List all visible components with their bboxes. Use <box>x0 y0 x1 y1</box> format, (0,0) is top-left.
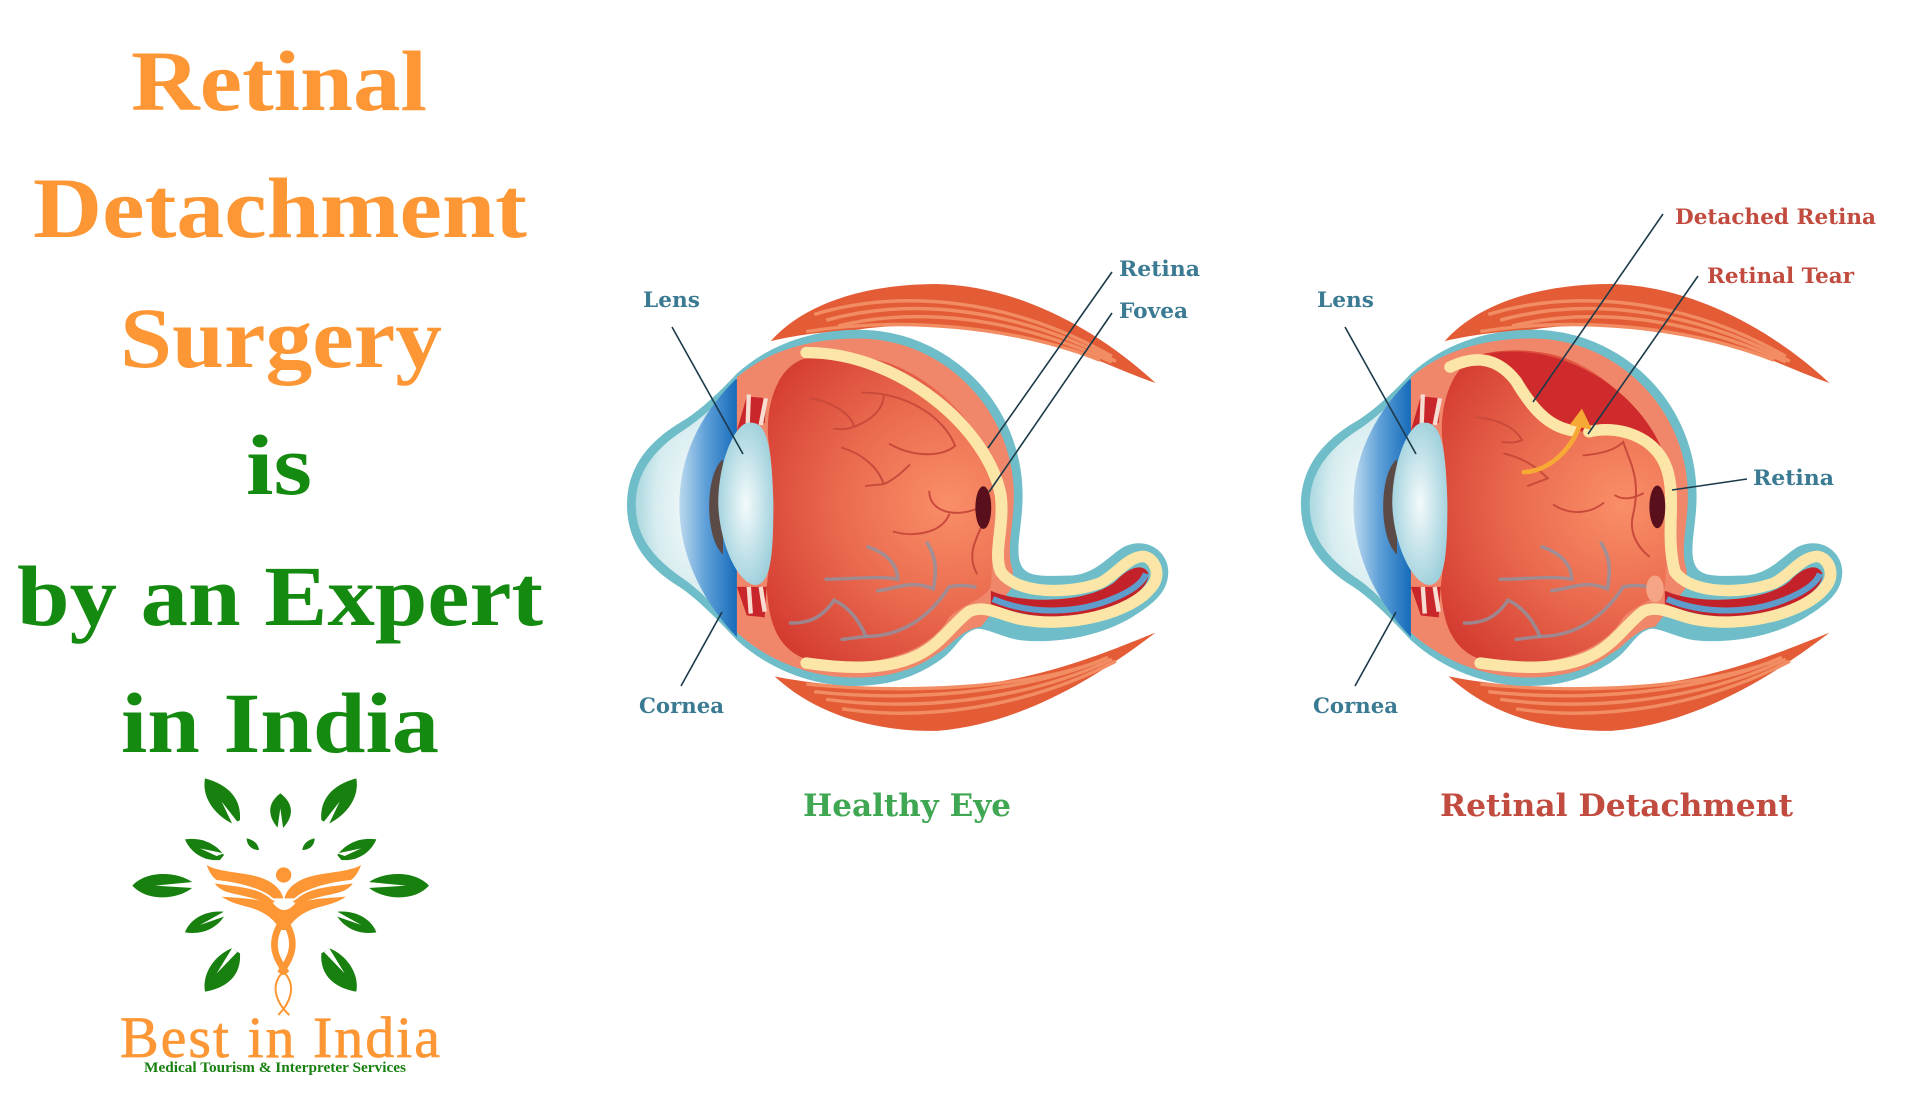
label: Fovea: Fovea <box>1119 298 1188 323</box>
iris band <box>679 379 739 637</box>
pupil <box>709 459 723 554</box>
label: Cornea: Cornea <box>639 693 724 718</box>
logo tagline: Medical Tourism & Interpreter Services <box>144 1060 406 1076</box>
leader lines <box>672 272 1112 686</box>
lens <box>718 423 773 585</box>
pupil <box>1383 459 1397 554</box>
title line: Surgery: Surgery <box>120 290 442 386</box>
caption: Healthy Eye: Healthy Eye <box>803 788 1011 824</box>
optic nerve vessels <box>1665 567 1822 617</box>
panel: healthy eye <box>627 256 1200 824</box>
title line: is: is <box>246 417 312 513</box>
fovea <box>1649 486 1665 528</box>
red veins <box>1476 417 1649 556</box>
label: Retina: Retina <box>1753 465 1834 490</box>
title line: Detachment: Detachment <box>33 160 527 256</box>
title line: Retinal: Retinal <box>131 33 427 129</box>
upper muscle <box>771 284 1156 383</box>
sclera and optic nerve outer <box>627 330 1168 686</box>
blue veins <box>1464 543 1649 639</box>
choroid <box>737 338 1014 678</box>
label: Cornea: Cornea <box>1313 693 1398 718</box>
upper muscle <box>1445 284 1830 383</box>
zonule fibres <box>1411 394 1441 617</box>
optic disc <box>1646 575 1664 602</box>
lower muscle <box>1449 633 1830 731</box>
cornea <box>1310 383 1411 631</box>
lower muscle <box>775 633 1156 731</box>
zonule fibres <box>737 394 767 617</box>
caption: Retinal Detachment: Retinal Detachment <box>1440 788 1794 824</box>
label: Retinal Tear: Retinal Tear <box>1707 263 1855 288</box>
arrow: fluid through tear <box>1524 409 1592 472</box>
red veins <box>810 393 981 574</box>
vitreous chamber <box>1441 350 1677 663</box>
title line: by an Expert: by an Expert <box>17 548 543 644</box>
label: Lens: Lens <box>1317 287 1374 312</box>
title <box>17 33 543 771</box>
eye diagram: detached <box>1301 284 1842 731</box>
leader lines <box>1345 214 1747 686</box>
panel: retinal detachment <box>1301 204 1876 824</box>
subretinal space <box>1488 352 1665 457</box>
retina layer <box>806 353 1157 667</box>
vitreous chamber <box>767 356 997 663</box>
eye diagram: healthy <box>627 284 1168 731</box>
logo wordmark: Best in India <box>120 1005 440 1070</box>
title line: in India: in India <box>121 675 439 771</box>
label: Detached Retina: Detached Retina <box>1675 204 1876 229</box>
choroid <box>1411 338 1688 678</box>
retina detached section <box>1450 360 1573 431</box>
iris band <box>1353 379 1413 637</box>
icon: leaves and winged figure <box>132 778 429 1015</box>
label: Lens: Lens <box>643 287 700 312</box>
blue veins <box>790 543 975 639</box>
logo: Best in India <box>120 778 440 1076</box>
retina attached section <box>1480 430 1831 667</box>
label: Retina: Retina <box>1119 256 1200 281</box>
fovea <box>975 486 991 529</box>
optic nerve vessels <box>991 567 1148 617</box>
cornea <box>636 383 737 631</box>
lens <box>1392 423 1447 585</box>
sclera and optic nerve outer <box>1301 330 1842 686</box>
